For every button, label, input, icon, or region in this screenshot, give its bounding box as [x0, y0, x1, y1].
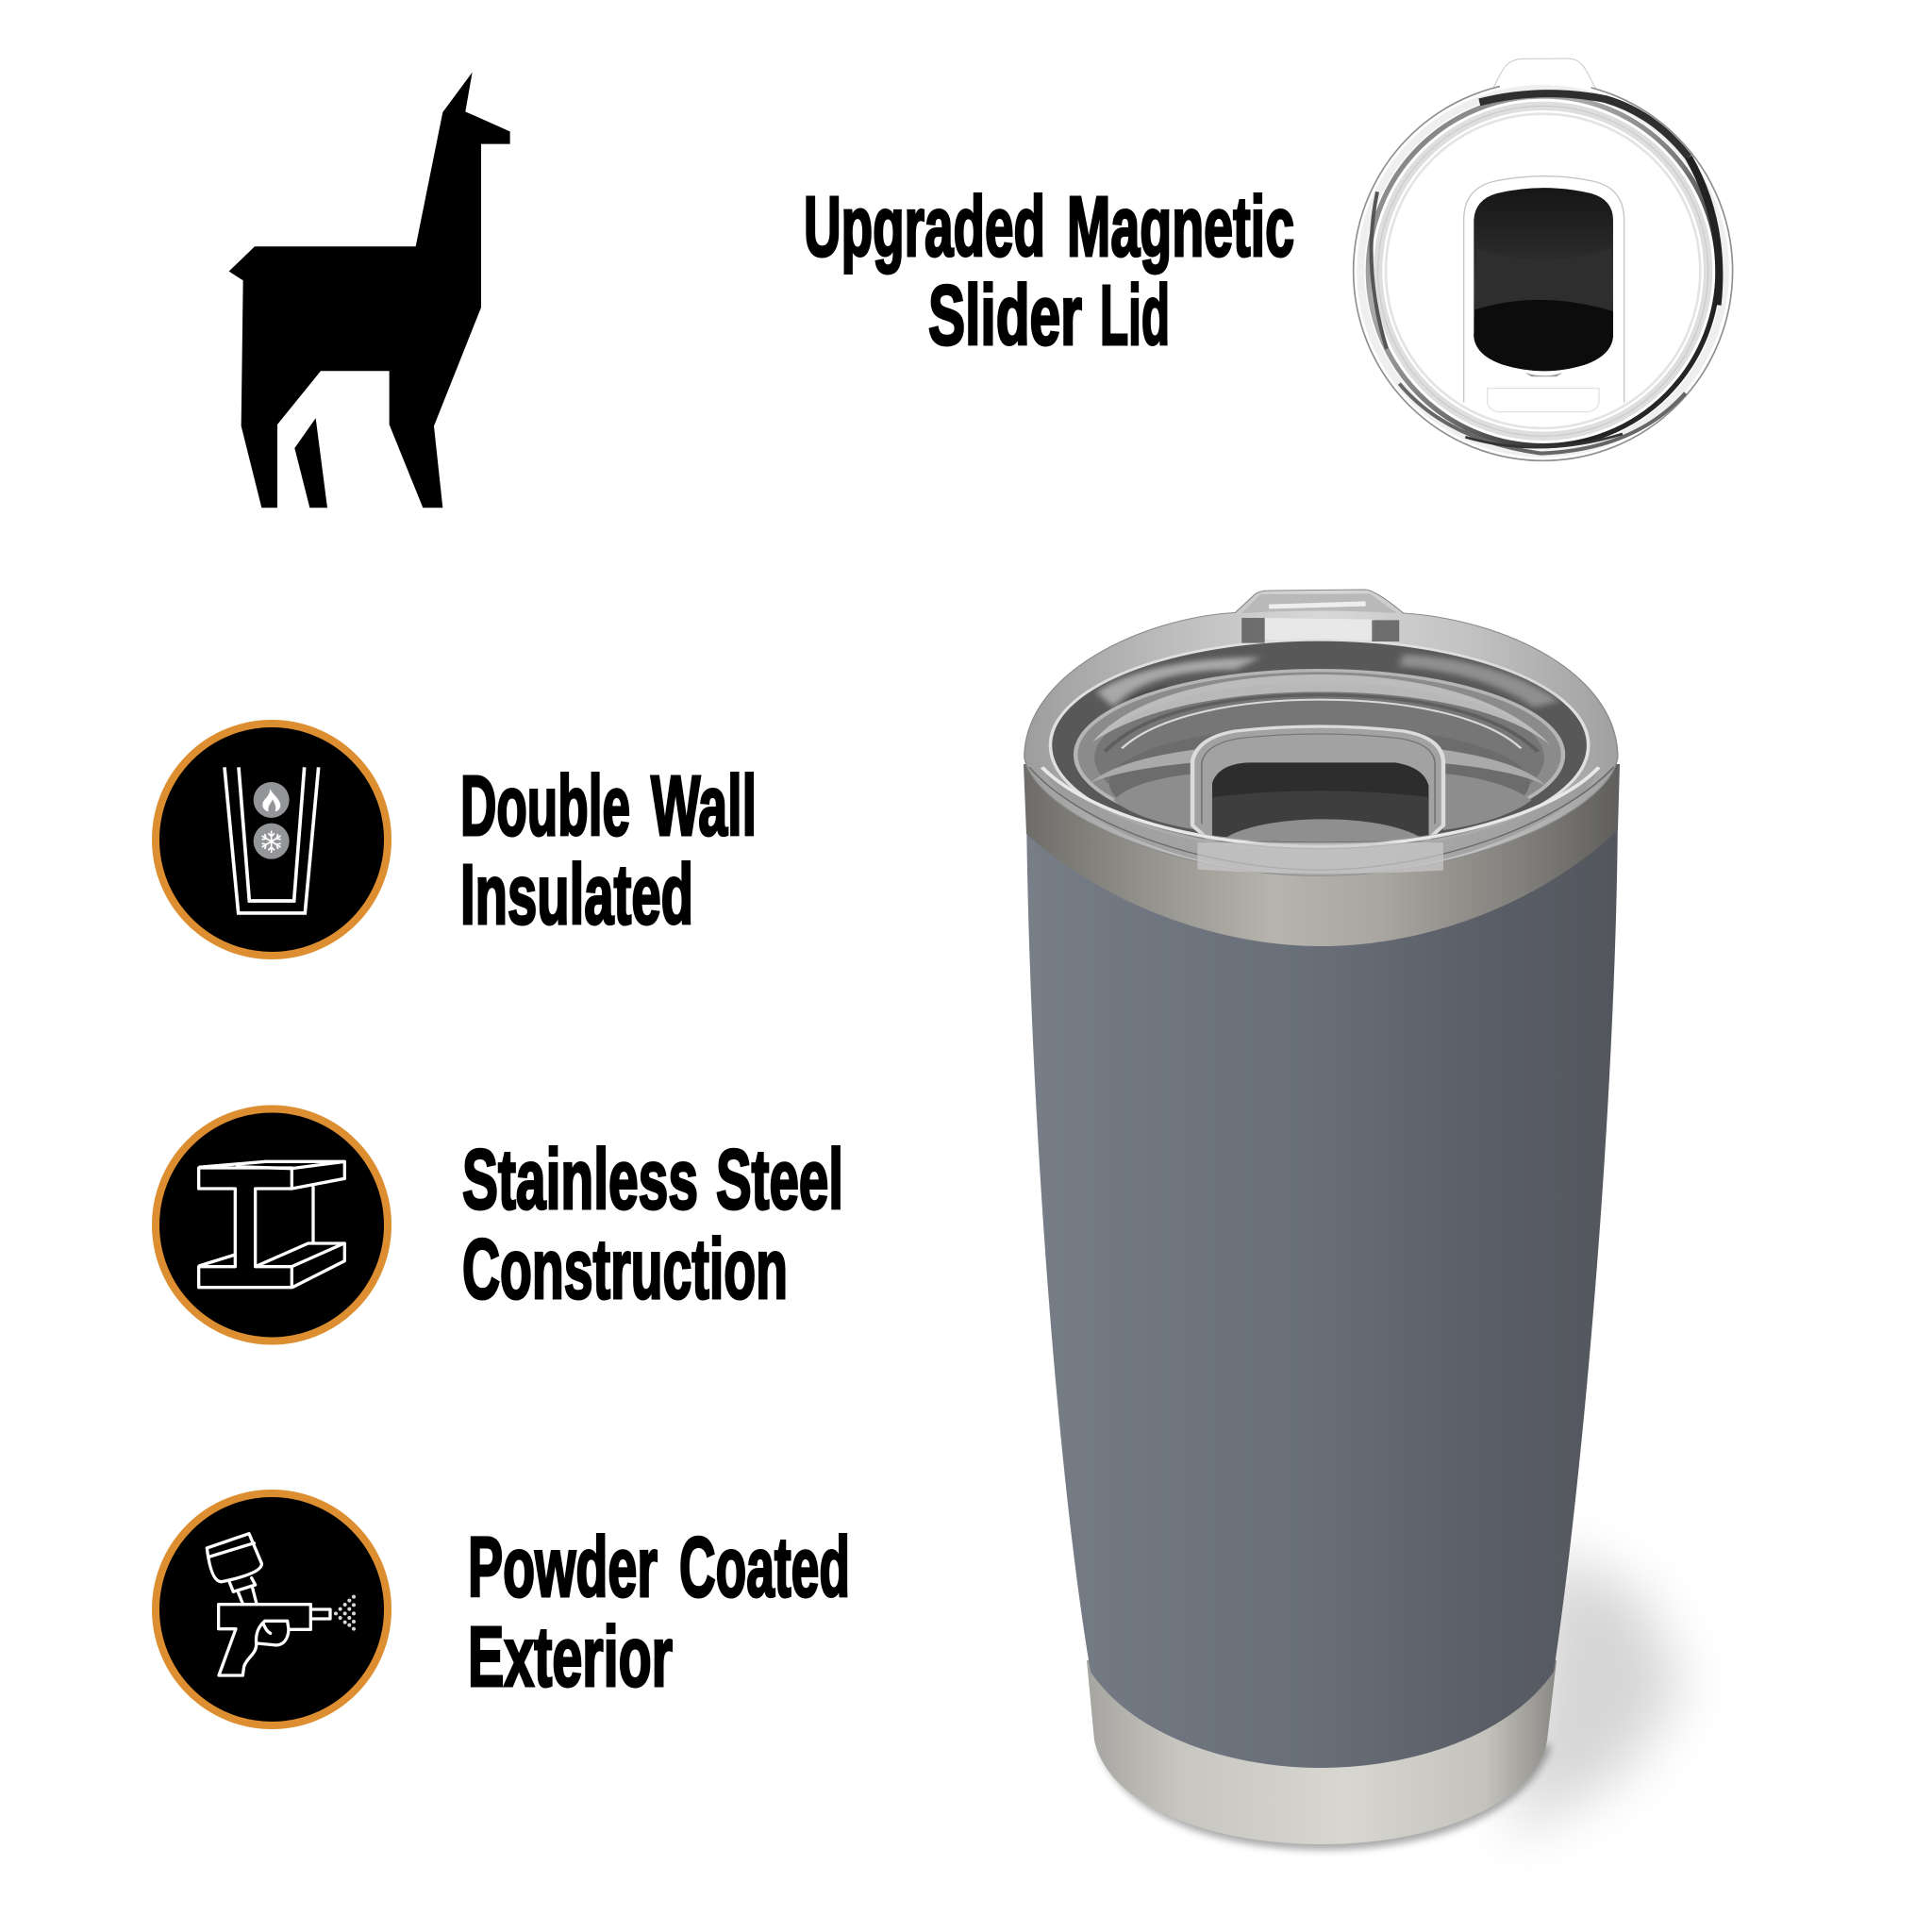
- product: shadow: [1509, 1547, 1684, 1840]
- lid tab highlight: [1241, 593, 1397, 613]
- label: double wall insulated: Insulated: [460, 848, 693, 942]
- inner floor: [1109, 726, 1529, 840]
- label: powder coated exterior: Coated: [679, 1521, 850, 1615]
- label: double wall insulated: [460, 759, 757, 942]
- slider channel: [1464, 176, 1624, 403]
- product: tumbler: [1024, 590, 1620, 1850]
- label: double wall insulated: Double: [460, 759, 630, 854]
- label: double wall insulated: Wall: [651, 759, 757, 854]
- tumbler contact shadow: [1098, 1745, 1552, 1850]
- label: stainless steel construction: Construction: [462, 1223, 788, 1317]
- icon: steel i-beam: [156, 1109, 388, 1341]
- product: slider lid from above: [1354, 58, 1733, 460]
- label: powder coated exterior: Powder: [468, 1521, 658, 1615]
- lid assembly: [1024, 590, 1618, 875]
- heading: upgraded magnetic slider lid: Lid: [1100, 269, 1170, 363]
- label: stainless steel construction: Stainless: [462, 1133, 698, 1227]
- icon: llama silhouette: [229, 73, 510, 508]
- lid tab: [1489, 58, 1601, 94]
- stainless steel base: [1087, 1660, 1557, 1844]
- label: stainless steel construction: [462, 1133, 843, 1317]
- lid outer ring: [1354, 81, 1733, 460]
- feature: double wall insulated: [156, 724, 757, 956]
- reflection streaks: [1096, 654, 1559, 724]
- upper steel band: [1024, 764, 1620, 946]
- powder coated body: [1026, 802, 1618, 1768]
- front rim highlight: [1046, 772, 1597, 875]
- heading: upgraded magnetic slider lid: [804, 180, 1294, 363]
- label: powder coated exterior: [468, 1521, 850, 1705]
- heading: upgraded magnetic slider lid: Upgraded: [804, 180, 1045, 275]
- icon: double wall glass: [156, 724, 388, 956]
- slider cavity: [1192, 726, 1443, 839]
- heading: upgraded magnetic slider lid: Magnetic: [1067, 180, 1294, 275]
- label: stainless steel construction: Steel: [716, 1133, 843, 1227]
- heading: upgraded magnetic slider lid: Slider: [928, 269, 1082, 363]
- slider knob reflection: [1224, 819, 1423, 842]
- feature: powder coated exterior: [156, 1493, 850, 1725]
- feature: stainless steel construction: [156, 1109, 843, 1341]
- inner glass ring: [1075, 671, 1563, 839]
- icon: spray gun: [156, 1493, 388, 1725]
- lid outer shell: [1024, 590, 1618, 875]
- inner opening: [1050, 640, 1589, 851]
- label: powder coated exterior: Exterior: [468, 1610, 673, 1705]
- magnetic slider knob: [1474, 188, 1613, 371]
